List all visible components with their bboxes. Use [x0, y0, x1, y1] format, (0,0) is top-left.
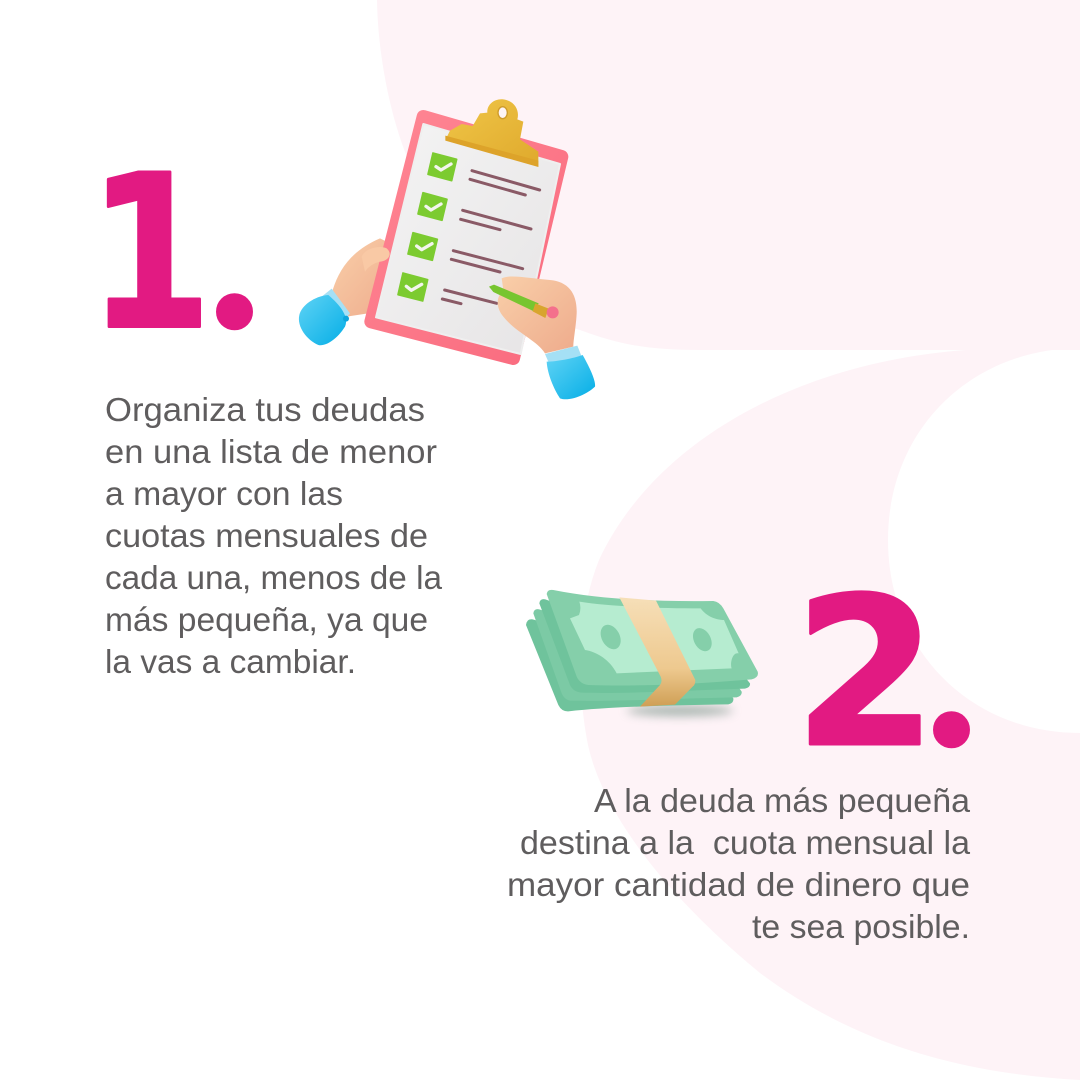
left hand [333, 238, 397, 317]
step 1 text: cuotas mensuales de [105, 517, 428, 554]
list lines [442, 171, 540, 304]
bill light panel [570, 602, 739, 673]
clipboard board [371, 117, 562, 358]
icon: stack of money [526, 590, 758, 716]
left thumb [362, 247, 390, 272]
icon: clipboard with hands [299, 99, 595, 399]
clipboard paper [376, 124, 560, 354]
right cuff [545, 346, 595, 399]
money shadow [627, 705, 733, 716]
step 1 text: más pequeña, ya que [105, 601, 428, 638]
background: lower-right pink shape [580, 348, 1080, 1080]
background: top-right pink shape [377, 0, 1080, 350]
step 1 text: a mayor con las [105, 475, 343, 512]
clipboard clip [445, 99, 538, 167]
step 2 text: te sea posible. [752, 908, 970, 945]
top bill [547, 590, 758, 685]
bill ovals [597, 621, 715, 654]
step 2 number: . [923, 543, 980, 795]
step 1 text: cada una, menos de la [105, 559, 443, 596]
step 2 number: 2 [794, 555, 937, 793]
checkboxes [398, 153, 457, 301]
step 2 text: mayor cantidad de dinero que [507, 866, 970, 903]
bill stack [526, 619, 733, 711]
right hand with pencil [489, 276, 577, 353]
step 2 text: destina a la cuota mensual la [520, 824, 971, 861]
left cuff [299, 289, 350, 345]
paper band [619, 597, 695, 707]
step 1 number: . [206, 125, 263, 377]
step 2 text: A la deuda más pequeña [594, 782, 971, 819]
step 1 text [105, 391, 443, 680]
step 2 text [507, 782, 971, 945]
step 1 text: la vas a cambiar. [105, 643, 356, 680]
step 1 number: 1 [88, 130, 212, 376]
step 1 text: Organiza tus deudas [105, 391, 425, 428]
step 1 text: en una lista de menor [105, 433, 437, 470]
